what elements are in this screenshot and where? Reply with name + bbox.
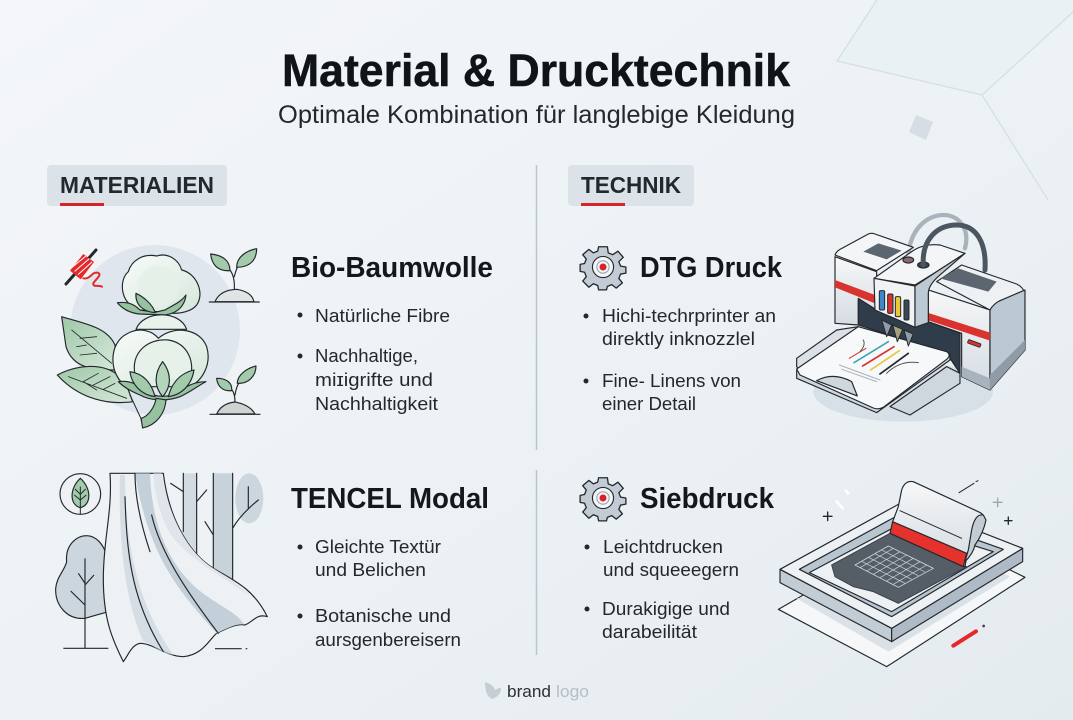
list: TENCEL Modal (298, 537, 461, 650)
illustration: fabric and forest (56, 473, 267, 662)
section label: Materialien (47, 165, 227, 206)
list: Siebdruck: und squeeegern (603, 560, 739, 580)
list: DTG Druck (584, 306, 776, 414)
list: Siebdruck: darabeilität (602, 622, 697, 642)
list: TENCEL Modal: und Belichen (315, 560, 426, 580)
icon: upper sprout (209, 249, 259, 302)
stem (130, 395, 166, 428)
list: Bio-Baumwolle: Nachhaltige, (315, 346, 418, 366)
printer body (835, 233, 1025, 390)
subtitle: Optimale Kombination für langlebige Kleidung (278, 101, 795, 129)
brand logo: brand (507, 682, 551, 701)
squeegee (890, 481, 986, 567)
print head (874, 225, 985, 346)
list: TENCEL Modal: Gleichte Textür (315, 537, 441, 557)
list: Siebdruck: Leichtdrucken (603, 537, 723, 557)
leaves (57, 317, 133, 403)
icon: leaf badge (60, 474, 101, 514)
list: DTG Druck: Hichi-techrprinter an (602, 306, 776, 326)
icon: gear DTG (580, 247, 626, 290)
printed lines (839, 340, 918, 382)
illustration: cotton plant (57, 245, 260, 428)
list: TENCEL Modal: aursgenbereisern (315, 630, 461, 650)
forest trunks (171, 473, 263, 583)
print tray (797, 327, 960, 415)
brand logo: logo (556, 682, 589, 701)
list: DTG Druck: direktly inknozzlel (602, 329, 755, 349)
title: Material & Drucktechnik (282, 45, 791, 96)
list: Bio-Baumwolle (298, 306, 450, 414)
icon: lower sprout (210, 366, 260, 414)
list: Bio-Baumwolle: Nachhaltigkeit (315, 394, 438, 414)
illustration: DTG printer (797, 215, 1025, 422)
illustration: screen printing (778, 481, 1025, 667)
heading: DTG Druck: DTG Druck (640, 252, 783, 284)
list: TENCEL Modal: Botanische und (315, 606, 451, 626)
section label: Technik (568, 165, 694, 206)
heading: Bio-Baumwolle: Bio-Baumwolle (291, 252, 493, 284)
sparkles and accents (823, 481, 1012, 646)
paper sheet (778, 560, 1025, 667)
icon: gear Siebdruck (580, 478, 626, 521)
ink puddle with mesh (832, 533, 967, 603)
list: Bio-Baumwolle: Natürliche Fibre (315, 306, 450, 326)
cotton boll: top (117, 255, 200, 315)
heading: Siebdruck: Siebdruck (640, 483, 775, 515)
fabric drape (103, 473, 267, 662)
list: DTG Druck: Fine- Linens von (602, 371, 741, 391)
screen frame (780, 502, 1023, 642)
brand logo (485, 682, 589, 701)
small tree (56, 536, 108, 648)
section label: Materialien: MATERIALIEN (60, 172, 214, 198)
cotton boll: lower (113, 315, 208, 400)
icon: thread spool (66, 250, 102, 287)
list: Bio-Baumwolle: miɪigrifte und (315, 370, 433, 390)
heading: TENCEL Modal: TENCEL Modal (291, 483, 489, 515)
section label: Technik: TECHNIK (581, 172, 681, 198)
list: DTG Druck: einer Detail (602, 394, 696, 414)
list: Siebdruck (584, 537, 739, 642)
list: Siebdruck: Durakigige und (602, 599, 730, 619)
hoses (908, 215, 966, 260)
